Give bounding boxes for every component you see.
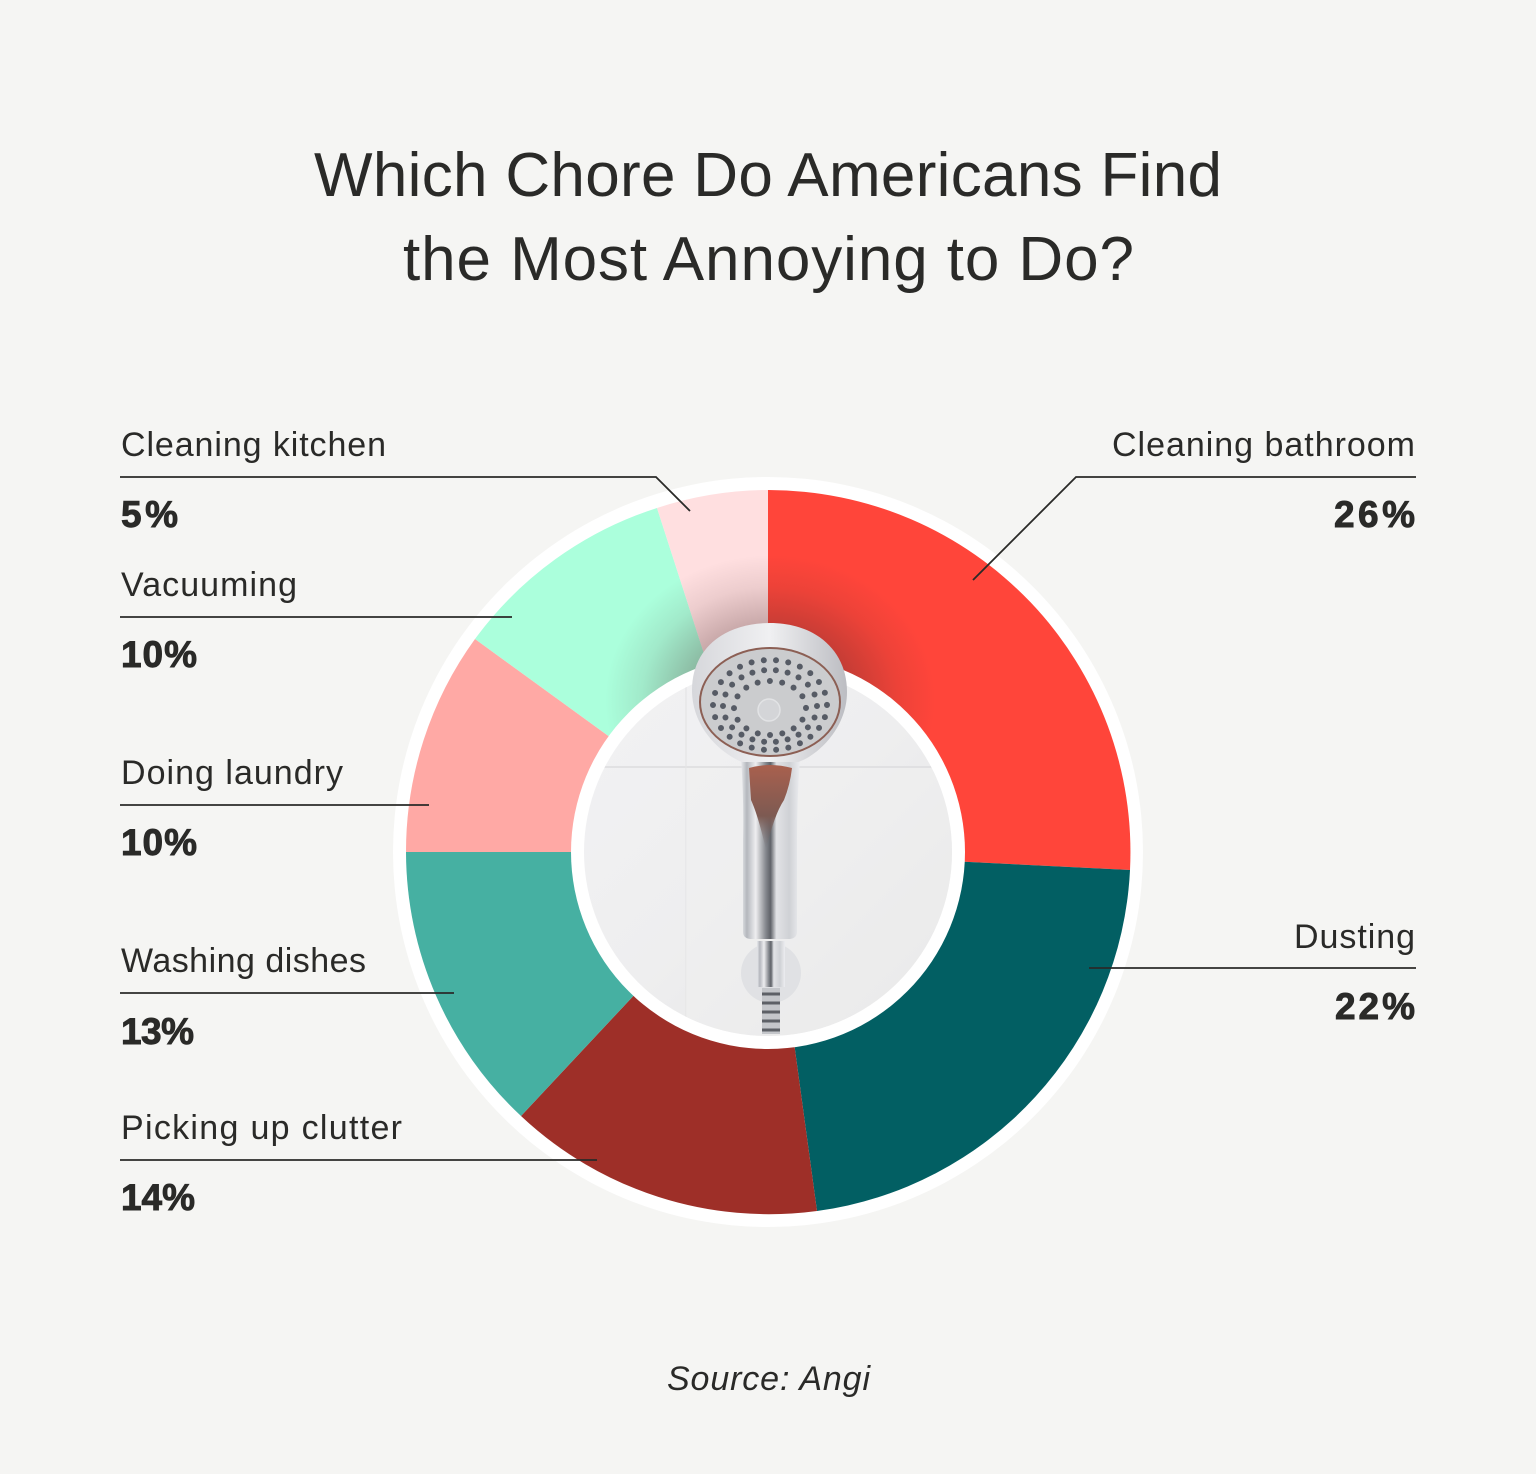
label: cleaning bathroom 26%: Cleaning bathroom: [1112, 426, 1415, 464]
handle: [741, 758, 800, 939]
label: dusting 22%: [1089, 918, 1416, 1027]
hose: [762, 988, 780, 1034]
label: cleaning kitchen 5%: 5%: [121, 494, 178, 535]
label: doing laundry 10%: [120, 754, 429, 863]
handle reflection: [749, 765, 792, 850]
label: cleaning bathroom 26%: 26%: [1334, 494, 1415, 535]
mount bracket: [757, 941, 785, 987]
label: cleaning kitchen 5%: Cleaning kitchen: [121, 426, 386, 464]
slice: vacuuming 10%: [475, 508, 768, 852]
donut chart: [393, 477, 1143, 1227]
inner white ring: [571, 655, 965, 1049]
title: the Most Annoying to Do?: [403, 225, 1134, 294]
label: vacuuming 10%: Vacuuming: [121, 566, 297, 604]
slice: cleaning bathroom 26%: [768, 490, 1130, 870]
label: washing dishes 13%: [120, 942, 454, 1052]
head face: [701, 649, 839, 755]
label: cleaning bathroom 26%: [973, 426, 1416, 580]
label: doing laundry 10%: 10%: [121, 822, 197, 863]
label: picking up clutter 14%: [120, 1109, 597, 1218]
title: [314, 141, 1222, 294]
icon: shower head: [692, 623, 847, 1034]
head face rim: [699, 647, 841, 757]
head body: [692, 623, 847, 762]
slice: washing dishes 13%: [406, 852, 768, 1116]
label: cleaning kitchen 5%: [120, 426, 690, 535]
photo: tiled wall: [584, 668, 952, 1036]
label: vacuuming 10%: 10%: [121, 634, 197, 675]
hose ribs: [762, 994, 780, 1030]
label: picking up clutter 14%: 14%: [121, 1177, 195, 1218]
wall mount: [741, 943, 801, 1003]
shower head shadow: [619, 569, 918, 722]
label: dusting 22%: 22%: [1335, 986, 1415, 1027]
slice: cleaning kitchen 5%: [657, 490, 768, 852]
label: vacuuming 10%: [120, 566, 512, 675]
slice: doing laundry 10%: [406, 639, 768, 852]
slice: dusting 22%: [768, 852, 1130, 1211]
centre button: [758, 699, 780, 721]
label: washing dishes 13%: 13%: [121, 1011, 194, 1052]
label: picking up clutter 14%: Picking up clutter: [121, 1109, 402, 1147]
title: Which Chore Do Americans Find: [314, 141, 1222, 210]
source: Source: Angi: [667, 1360, 871, 1398]
slice: picking up clutter 14%: [521, 852, 817, 1214]
label: washing dishes 13%: Washing dishes: [121, 942, 366, 980]
label: doing laundry 10%: Doing laundry: [121, 754, 343, 792]
spray holes: [713, 660, 827, 750]
label: dusting 22%: Dusting: [1294, 918, 1415, 956]
